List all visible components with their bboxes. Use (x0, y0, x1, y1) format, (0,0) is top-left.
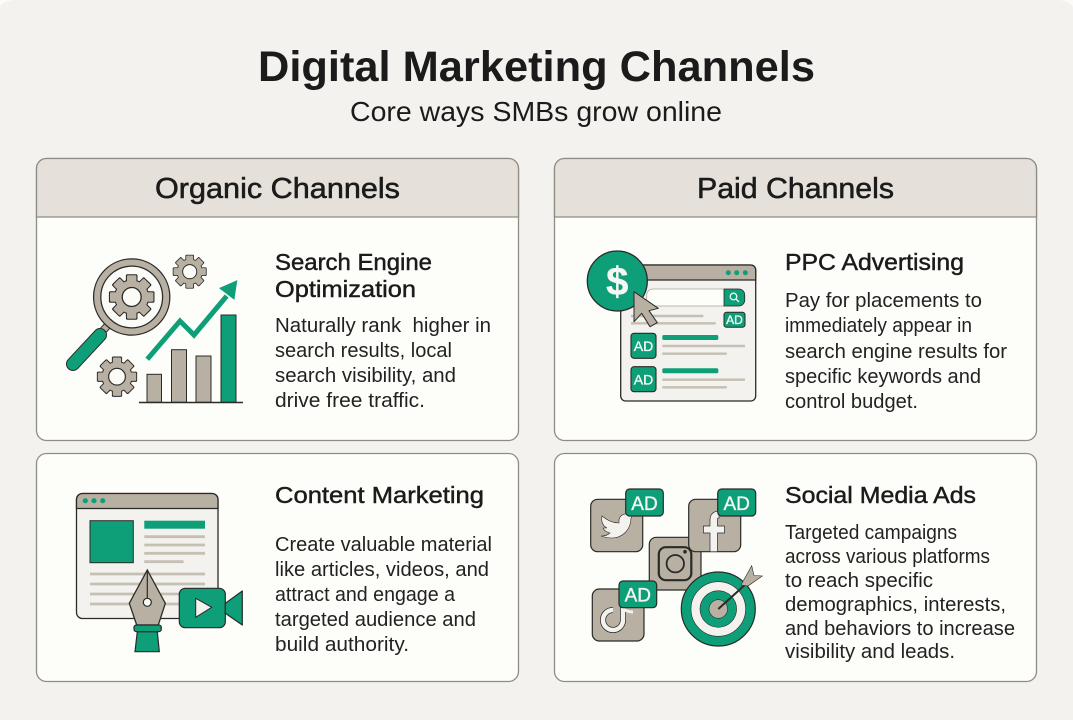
text: content marketing description: build authority. (275, 634, 409, 656)
icon: social media ads and target: AD (625, 586, 651, 606)
panel: social media ads card (554, 454, 1036, 682)
text: social media ads description: across various platforms (785, 546, 990, 568)
title: Digital Marketing Channels (258, 43, 815, 91)
icon: PPC browser with dollar and cursor: $ (606, 260, 628, 304)
heading: social media ads: Social Media Ads (785, 482, 976, 508)
text: PPC description: immediately appear in (785, 315, 972, 337)
icon: content browser, pen and video camera (76, 494, 242, 652)
text: content marketing description: like articles, videos, and (275, 559, 489, 581)
text: social media ads description: demographics, interests, (785, 594, 1006, 616)
text: content marketing description: attract and engage a (275, 584, 456, 606)
icon: PPC browser with dollar and cursor: AD (726, 313, 743, 327)
text: PPC description: control budget. (785, 391, 918, 413)
text: social media ads description: to reach specific (785, 570, 933, 592)
icon: PPC browser with dollar and cursor: AD (634, 371, 653, 387)
heading: paid channels: Paid Channels (697, 173, 894, 205)
text: SEO description: Naturally rank higher in (275, 315, 491, 337)
text: SEO description: search results, local (275, 340, 452, 362)
heading: search engine optimization: Search Engine (275, 249, 432, 275)
panel: paid channels (554, 158, 1036, 682)
heading: PPC advertising: PPC Advertising (785, 249, 964, 275)
text: social media ads description: and behaviors to increase (785, 618, 1015, 640)
text: content marketing description: Create valuable material (275, 534, 492, 556)
heading: organic channels: Organic Channels (155, 173, 400, 205)
icon: social media ads and target: AD (631, 494, 658, 515)
heading: search engine optimization: Optimization (275, 276, 416, 302)
icon: SEO magnifier, gears and growth chart (73, 255, 243, 402)
subtitle: Core ways SMBs grow online (350, 96, 722, 127)
panel: search engine optimization card (36, 158, 518, 440)
heading: content marketing: Content Marketing (275, 482, 484, 508)
text: social media ads description: visibility and leads. (785, 641, 955, 663)
text: SEO description: drive free traffic. (275, 390, 425, 412)
panel: content marketing card (36, 454, 518, 682)
text: PPC description: Pay for placements to (785, 290, 982, 312)
icon: PPC browser with dollar and cursor (587, 251, 756, 401)
text: SEO description: search visibility, and (275, 365, 456, 387)
text: PPC description: search engine results for (785, 341, 1007, 363)
text: social media ads description: Targeted campaigns (785, 522, 957, 544)
icon: social media ads and target (591, 489, 762, 646)
text: PPC description: specific keywords and (785, 366, 981, 388)
panel: organic channels (36, 158, 518, 682)
icon: social media ads and target: AD (723, 494, 750, 515)
text: content marketing description: targeted audience and (275, 609, 476, 631)
icon: PPC browser with dollar and cursor: AD (634, 338, 653, 354)
panel: PPC advertising card (554, 158, 1036, 440)
